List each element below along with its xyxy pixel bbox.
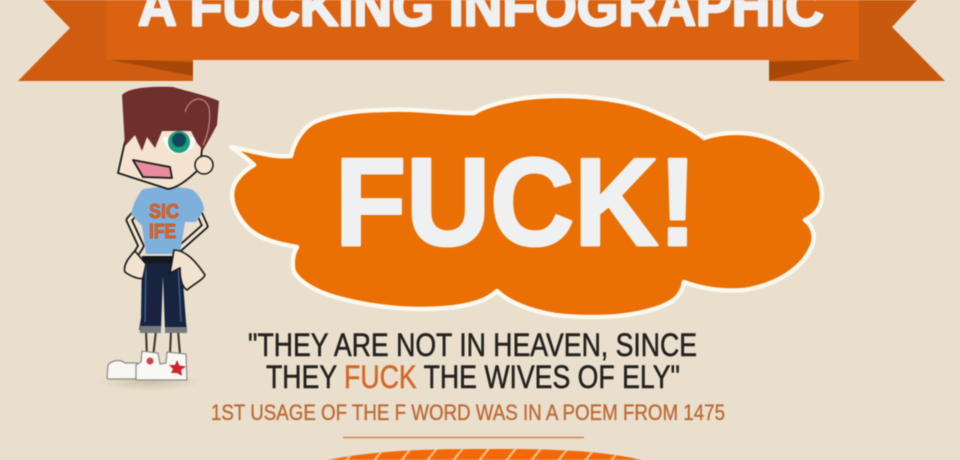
slogan line two: IFE — [149, 221, 176, 243]
left sneaker — [107, 361, 137, 379]
belt — [143, 256, 181, 263]
cartoon character — [98, 87, 219, 391]
right arm — [178, 206, 205, 250]
bubble cloud shape — [231, 96, 822, 317]
ribbon main band — [106, 0, 859, 60]
eye — [162, 131, 196, 154]
slogan line one: SIC — [149, 201, 179, 223]
hair — [122, 87, 219, 151]
t-shirt — [131, 187, 204, 254]
right ribbon tail — [769, 0, 945, 81]
bubble word: FUCK! — [335, 134, 697, 272]
quote line one: "THEY ARE NOT IN HEAVEN, SINCE — [248, 327, 697, 363]
pupil — [172, 133, 186, 147]
mouth — [133, 160, 172, 178]
banner ribbon — [18, 0, 945, 81]
legs — [146, 331, 180, 357]
ground shadow — [98, 373, 202, 391]
trouser cuffs — [140, 326, 187, 333]
quote line two: THEY FUCK THE WIVES OF ELY" — [266, 359, 680, 395]
right sneaker — [136, 351, 187, 380]
speech bubble — [231, 96, 822, 317]
iris — [168, 131, 190, 153]
left ribbon fold — [106, 59, 193, 76]
quote source caption: 1ST USAGE OF THE F WORD WAS IN A POEM FROM 1475 — [211, 400, 725, 425]
left ribbon tail — [18, 0, 193, 81]
next section striped dome — [328, 448, 642, 460]
quote — [248, 327, 697, 395]
trousers — [139, 256, 187, 330]
left hand — [125, 251, 146, 279]
sneaker star — [169, 360, 186, 376]
right ribbon fold — [769, 59, 859, 80]
head — [118, 120, 205, 189]
t-shirt slogan — [149, 201, 179, 243]
left arm — [129, 204, 143, 262]
eye white — [162, 137, 196, 154]
small sneaker star — [146, 358, 154, 364]
ear — [195, 156, 213, 174]
right hand — [170, 250, 205, 290]
